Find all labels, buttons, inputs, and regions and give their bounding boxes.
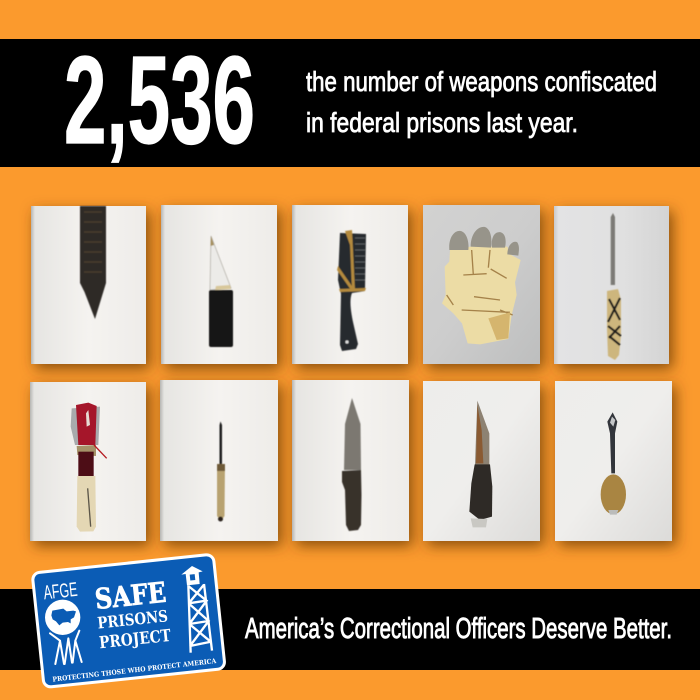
panel: sharpened spoon bbox=[555, 381, 672, 541]
panel: slim ice pick bbox=[160, 380, 278, 541]
top black band bbox=[0, 32, 700, 170]
headline description bbox=[306, 66, 657, 138]
icon: three figures holding globe bbox=[50, 631, 82, 664]
big number 2,536: 2,536 bbox=[64, 32, 255, 170]
panel: glass blade knife bbox=[161, 205, 277, 364]
logo card: Safe Prisons Project bbox=[32, 554, 225, 688]
panel: wrapped spike bbox=[554, 206, 669, 364]
panel: comb shank bbox=[292, 205, 408, 364]
globe with USA map bbox=[45, 600, 80, 635]
project name: PRISONS bbox=[96, 606, 169, 633]
tagline: PROTECTING THOSE WHO PROTECT AMERICA bbox=[52, 657, 217, 684]
panel: metal knife bbox=[292, 380, 409, 541]
project name: PROJECT bbox=[98, 625, 172, 652]
panel: rusty blade bbox=[423, 381, 540, 541]
icon: watchtower bbox=[181, 566, 212, 653]
AFGE wordmark: AFGE bbox=[42, 579, 79, 604]
project name: SAFE bbox=[93, 576, 168, 616]
photo panels row 2 bbox=[30, 380, 672, 541]
project name bbox=[52, 576, 217, 684]
panel: padded glove bbox=[423, 205, 540, 364]
headline description: in federal prisons last year. bbox=[306, 107, 578, 138]
photo panels row 1 bbox=[31, 205, 669, 364]
panel: red razor weapon bbox=[30, 382, 146, 541]
bottom black band bbox=[0, 589, 700, 670]
panel: sharpened metal bar bbox=[31, 206, 146, 364]
